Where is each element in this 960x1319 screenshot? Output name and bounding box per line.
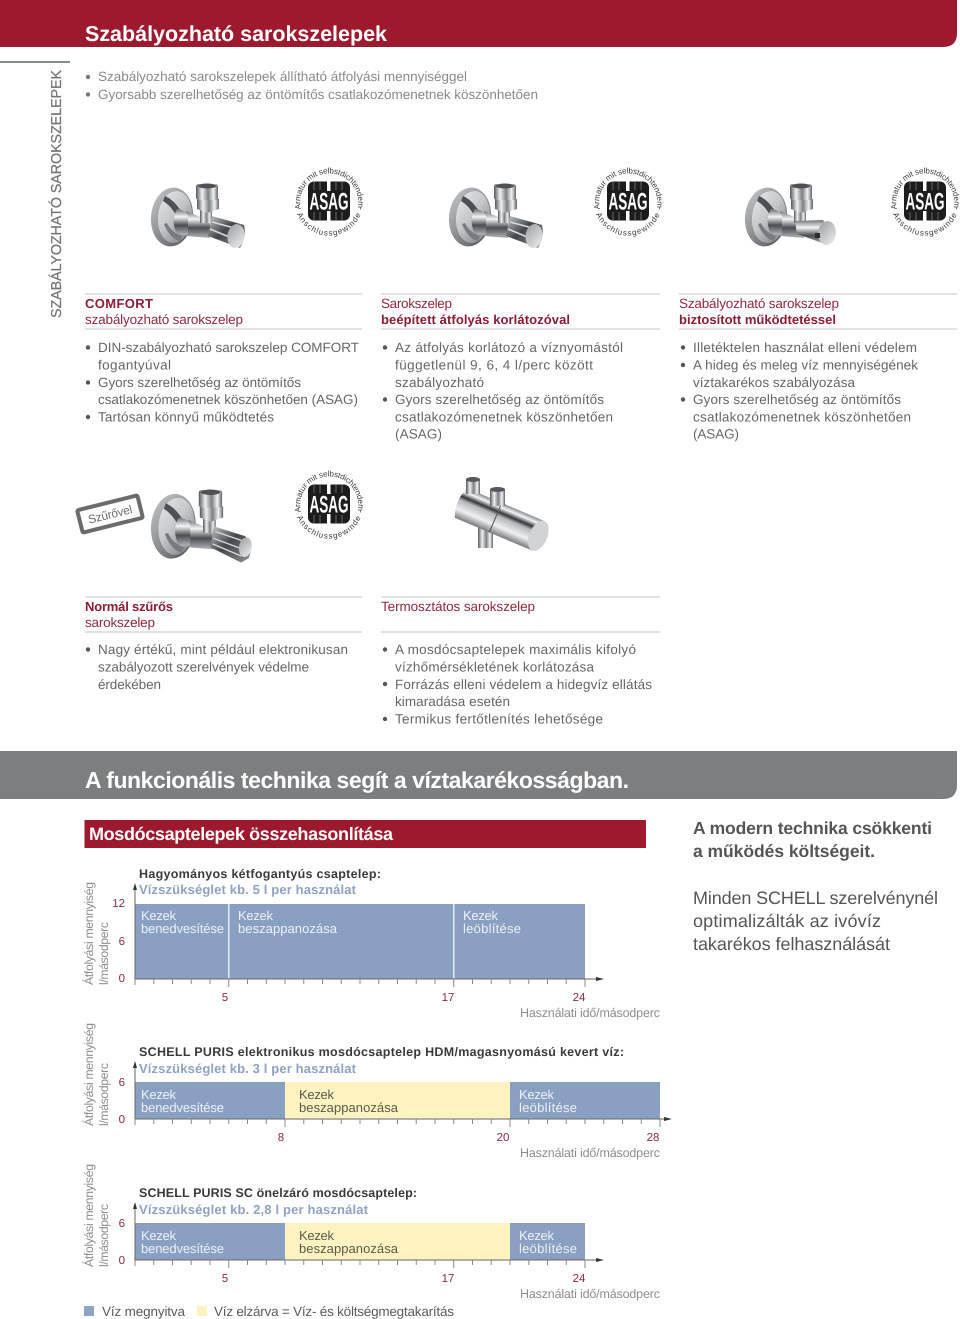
axis values: 6 (119, 936, 125, 948)
callout: running costs: a működés költségeit. (693, 841, 875, 861)
axis values: 24 (573, 1273, 586, 1285)
axis values (119, 1077, 659, 1144)
y-axis title: Átfolyási mennyiség (82, 1023, 96, 1126)
axis values: 24 (573, 992, 586, 1004)
icon: secured valve (742, 184, 837, 249)
list: flow limiter features: függetlenül 9, 6, 4 l/perc között (395, 358, 593, 372)
list: secured valve features: csatlakozómenetnek köszönhetően (693, 410, 911, 424)
heading: secured valve: Szabályozható sarokszelep (679, 296, 839, 311)
icon: thermostatic valve (452, 477, 553, 554)
x-axis title: Használati idő/másodperc (520, 1006, 660, 1020)
chart title: Vízszükséglet kb. 5 l per használat (139, 882, 357, 897)
chart: SCHELL PURIS electronic mixer (82, 1023, 672, 1160)
axis values (112, 898, 586, 1004)
icon: ASAG badge 1: ASAG (310, 188, 348, 216)
x-axis title: Használati idő/másodperc (520, 1287, 660, 1301)
list: secured valve features: víztakarékos szabályozása (693, 375, 855, 390)
list: filter valve features (86, 642, 348, 692)
list: COMFORT features: Tartósan könnyű működtetés (98, 410, 274, 424)
chart title (139, 867, 381, 897)
list: thermostatic valve features: Forrázás elleni védelem a hidegvíz ellátás (395, 677, 652, 692)
icon: ASAG badge 3: Armatur mit selbstdichtendem (891, 168, 960, 209)
bars: benedvesítése (141, 1241, 224, 1256)
heading: thermostatic valve: Termosztátos sarokszelep (381, 599, 535, 614)
list: secured valve features: (ASAG) (693, 426, 739, 442)
comparison banner: Mosdócsaptelepek összehasonlítása (89, 824, 394, 844)
axis values: 0 (119, 1255, 125, 1267)
bars: benedvesítése (141, 921, 224, 936)
section heading: A funkcionális technika segít a víztakarékosságban. (85, 767, 629, 793)
icon: ASAG badge 2: ASAG (608, 188, 648, 216)
intro bullets: Gyorsabb szerelhetőség az öntömítős csatlakozómenetnek köszönhetően (98, 87, 538, 102)
icon: ASAG badge 4: Armatur mit selbstdichtendem (295, 470, 364, 512)
bars (135, 1082, 660, 1119)
callout: running costs: takarékos felhasználását (693, 934, 890, 954)
bars: Kezek (299, 1228, 334, 1243)
list: COMFORT features: Gyors szerelhetőség az öntömítős (98, 375, 301, 390)
list: COMFORT features: csatlakozómenetnek köszönhetően (ASAG) (98, 392, 358, 407)
list: flow limiter features: Az átfolyás korlátozó a víznyomástól (395, 340, 623, 355)
icon: ASAG badge 2: Anschlussgewinde - (596, 208, 660, 237)
intro bullets (86, 69, 538, 102)
bars: beszappanozása (238, 921, 338, 936)
bars: Kezek (519, 1087, 554, 1102)
heading: filter valve (85, 599, 173, 630)
legend: Víz megnyitva (102, 1304, 185, 1319)
chart title (139, 1045, 624, 1076)
heading: filter valve: sarokszelep (85, 615, 155, 630)
panel: filter valve (85, 596, 362, 692)
callout: running costs (693, 818, 938, 954)
header band (0, 0, 957, 47)
y-axis title: l/másodperc (97, 1204, 111, 1267)
callout: running costs: optimalizálták az ivóvíz (693, 911, 881, 931)
chart title: SCHELL PURIS SC önelzáró mosdócsaptelep: (139, 1186, 417, 1200)
axis values: 12 (112, 898, 125, 910)
bars: Kezek (238, 908, 274, 923)
legend: Víz elzárva = Víz- és költségmegtakarítás (214, 1304, 454, 1319)
sidebar label: SZABÁLYOZHATÓ SAROKSZELEPEK (48, 70, 65, 318)
bars: benedvesítése (141, 1100, 224, 1115)
comparison banner (84, 820, 646, 848)
y-axis title (82, 1164, 111, 1267)
y-axis title: Átfolyási mennyiség (82, 1164, 96, 1267)
bars (135, 1223, 585, 1260)
list: flow limiter features: szabályozható (395, 375, 484, 390)
bars: leöblítése (519, 1100, 577, 1115)
axis values: 17 (442, 1273, 454, 1285)
y-axis title: l/másodperc (97, 1063, 111, 1126)
bars: Kezek (463, 908, 498, 923)
icon: ASAG badge 4: ASAG (310, 492, 348, 518)
list: secured valve features: Gyors szerelhetőség az öntömítős (693, 392, 901, 407)
axis values: 8 (278, 1132, 284, 1144)
axis values (119, 1218, 586, 1285)
panel: thermostatic valve (381, 596, 660, 726)
axis values: 6 (119, 1077, 125, 1089)
chart title: Vízszükséglet kb. 2,8 l per használat (139, 1202, 369, 1217)
bars (135, 904, 585, 979)
stamp: Szűrővel (77, 495, 143, 533)
heading: flow limiter: Sarokszelep (381, 296, 452, 311)
panel: secured valve (679, 293, 957, 442)
chart: SCHELL PURIS SC self-closing mixer (82, 1164, 660, 1301)
y-axis title: l/másodperc (97, 922, 111, 985)
title: Szabályozható sarokszelepek (85, 22, 387, 46)
panel: COMFORT valve (85, 293, 362, 424)
intro bullets: Szabályozható sarokszelepek állítható átfolyási mennyiséggel (98, 69, 467, 84)
icon: ASAG badge 4 (295, 470, 364, 540)
chart title: Vízszükséglet kb. 3 l per használat (139, 1061, 357, 1076)
bars: leöblítése (519, 1241, 577, 1256)
list: flow limiter features (383, 340, 623, 442)
icon: flow limiter valve (446, 184, 544, 249)
list: filter valve features: Nagy értékű, mint például elektronikusan (98, 642, 348, 657)
axis values: 28 (647, 1132, 659, 1144)
list: filter valve features: szabályozott szerelvények védelme (98, 660, 309, 674)
list: thermostatic valve features: kimaradása esetén (395, 694, 510, 709)
list: secured valve features (681, 340, 918, 442)
bars: Kezek (141, 1087, 176, 1102)
icon: ASAG badge 2: Armatur mit selbstdichtendem (594, 168, 662, 209)
icon: filter valve (148, 489, 253, 563)
list: thermostatic valve features (383, 642, 652, 726)
list: COMFORT features (86, 340, 359, 424)
heading: secured valve (679, 296, 839, 327)
list: COMFORT features: fogantyúval (98, 358, 171, 372)
axis values: 5 (222, 992, 228, 1004)
icon: ASAG badge 2 (594, 168, 662, 237)
axis values: 17 (442, 992, 454, 1004)
heading: COMFORT: COMFORT (85, 296, 153, 311)
list: flow limiter features: (ASAG) (395, 426, 442, 442)
heading: filter valve: Normál szűrős (85, 599, 173, 614)
icon: ASAG badge 1 (295, 168, 364, 237)
list: filter valve features: érdekében (98, 677, 161, 692)
stamp: Szűrővel: Szűrővel (87, 502, 134, 527)
list: flow limiter features: csatlakozómenetnek köszönhetően (395, 410, 613, 424)
heading: COMFORT (85, 296, 243, 327)
chart title: Hagyományos kétfogantyús csaptelep: (139, 867, 381, 881)
bars: Kezek (519, 1228, 554, 1243)
callout: running costs: A modern technika csökkenti (693, 818, 932, 838)
axis values: 20 (497, 1132, 509, 1144)
section band (0, 751, 957, 799)
bars: beszappanozása (299, 1100, 399, 1115)
heading: flow limiter: beépített átfolyás korlátozóval (381, 312, 570, 327)
list: thermostatic valve features: vízhőmérsékletének korlátozása (395, 660, 594, 674)
icon: ASAG badge 3: Anschlussgewinde - (892, 208, 957, 237)
bars: beszappanozása (299, 1241, 399, 1256)
y-axis title (82, 882, 111, 985)
icon: ASAG badge 4: Anschlussgewinde - (296, 510, 361, 540)
axes (133, 1061, 672, 1127)
list: thermostatic valve features: A mosdócsaptelepek maximális kifolyó (395, 642, 636, 657)
chart title (139, 1186, 417, 1217)
bars: Kezek (299, 1087, 334, 1102)
chart title: SCHELL PURIS elektronikus mosdócsaptelep HDM/magasnyomású kevert víz: (139, 1045, 624, 1059)
icon: ASAG badge 1: Armatur mit selbstdichtendem (295, 168, 364, 209)
icon: ASAG badge 1: Anschlussgewinde - (296, 208, 361, 237)
axes (133, 1202, 604, 1268)
chart: traditional two-handle mixer (82, 867, 660, 1020)
bars: Kezek (141, 1228, 176, 1243)
x-axis title: Használati idő/másodperc (520, 1146, 660, 1160)
icon: ASAG badge 3 (891, 168, 960, 237)
axis values: 6 (119, 1218, 125, 1230)
panel: flow limiter valve (381, 293, 660, 442)
heading: COMFORT: szabályozható sarokszelep (85, 312, 243, 327)
axis values: 0 (119, 1114, 125, 1126)
icon: COMFORT valve (148, 184, 246, 249)
list: thermostatic valve features: Termikus fertőtlenítés lehetősége (395, 712, 603, 726)
axis values: 5 (222, 1273, 228, 1285)
y-axis title (82, 1023, 111, 1126)
list: secured valve features: A hideg és meleg víz mennyiségének (693, 358, 918, 372)
axes (133, 883, 604, 987)
bars: Kezek (141, 908, 176, 923)
heading: secured valve: biztosított működtetéssel (679, 312, 836, 327)
bars: leöblítése (463, 921, 521, 936)
callout: running costs: Minden SCHELL szerelvénynél (693, 888, 938, 908)
heading: flow limiter (381, 296, 570, 327)
axis values: 0 (119, 973, 125, 985)
legend (84, 1304, 454, 1319)
y-axis title: Átfolyási mennyiség (82, 882, 96, 985)
list: COMFORT features: DIN-szabályozható sarokszelep COMFORT (98, 340, 359, 355)
list: flow limiter features: Gyors szerelhetőség az öntömítős (395, 392, 604, 407)
list: secured valve features: Illetéktelen használat elleni védelem (693, 340, 917, 355)
